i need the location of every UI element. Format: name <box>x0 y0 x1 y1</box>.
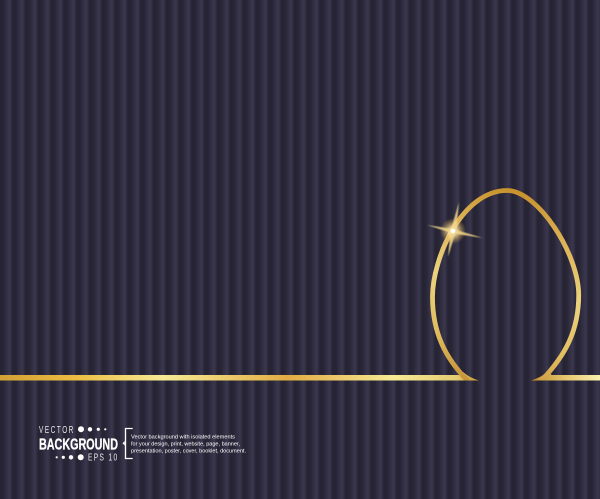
golden horizontal line left <box>0 372 479 380</box>
golden horizontal line right <box>531 372 600 380</box>
description text: Vector background with isolated elements <box>131 434 235 440</box>
sparkle star <box>427 202 483 257</box>
dots above <box>78 426 106 432</box>
logo: vector background eps 10 <box>39 425 246 464</box>
golden egg outline <box>432 190 579 381</box>
description text: for your design, print, website, page, banner, <box>131 442 241 448</box>
dots below <box>56 454 84 460</box>
label: eps 10: EPS 10 <box>88 453 118 464</box>
description text <box>131 434 246 454</box>
bracket point <box>122 441 125 446</box>
label: background: BACKGROUND <box>39 436 118 453</box>
bracket <box>126 428 133 458</box>
label: vector: VECTOR <box>39 425 75 436</box>
description text: presentation, poster, cover, booklet, document. <box>131 448 246 454</box>
